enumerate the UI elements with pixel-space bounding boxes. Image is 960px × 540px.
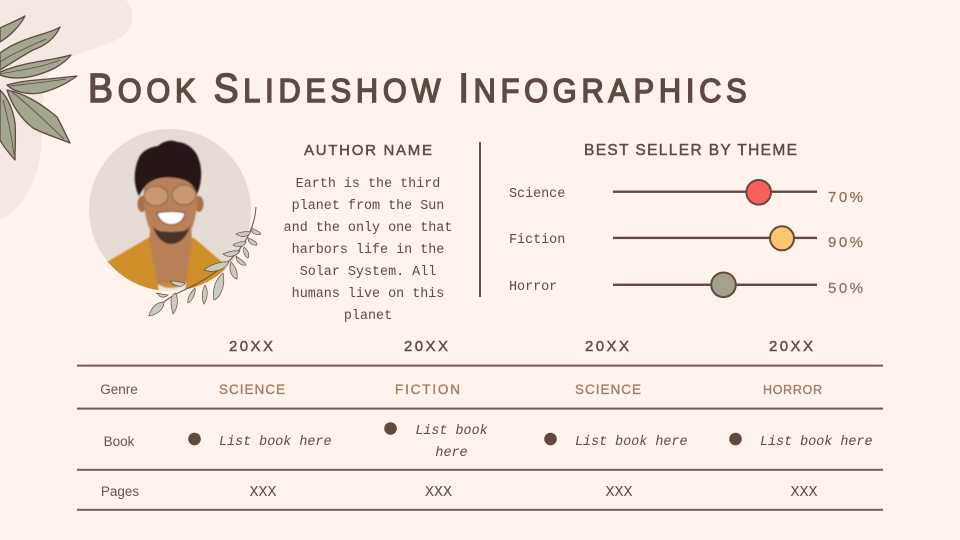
- row: pages: XXX: [425, 484, 452, 501]
- slider: horror 50%: 50%: [828, 280, 863, 297]
- title: BOOK SLIDESHOW INFOGRAPHICS: [88, 67, 747, 111]
- beard: [153, 226, 190, 244]
- author description: [284, 177, 452, 324]
- author description: and the only one that: [284, 221, 452, 236]
- twig decoration: [149, 207, 261, 316]
- author description: planet from the Sun: [292, 199, 444, 214]
- ears: [138, 196, 146, 212]
- row: book: List book here: [219, 435, 332, 450]
- row: book: [104, 422, 872, 461]
- row: pages: Pages: [101, 484, 139, 499]
- author description: Earth is the third: [296, 177, 440, 192]
- row: book: here: [435, 446, 468, 461]
- icon: corner leaves: [0, 16, 77, 160]
- row: pages: XXX: [605, 484, 633, 501]
- slider: fiction 90%: [509, 226, 863, 251]
- slider: horror 50%: Horror: [509, 280, 557, 295]
- author photo: [89, 129, 261, 316]
- table: [77, 338, 883, 511]
- row: book: Book: [104, 434, 135, 449]
- decorative background blob: [0, 0, 133, 220]
- slider: science 70%: Science: [509, 187, 565, 202]
- row: pages: [101, 484, 818, 501]
- author description: planet: [344, 309, 392, 324]
- slider: fiction 90%: 90%: [828, 234, 863, 251]
- year headers: 20XX: [404, 338, 448, 355]
- face: [142, 176, 198, 230]
- shirt: [107, 237, 226, 290]
- row: genre: Genre: [100, 382, 138, 397]
- row: genre: FICTION: [395, 382, 460, 397]
- row: book: List book here: [575, 435, 688, 450]
- author description: humans live on this: [292, 287, 444, 302]
- slider: science 70%: 70%: [828, 189, 863, 206]
- row: genre: SCIENCE: [575, 382, 641, 397]
- slider: horror 50%: [509, 272, 863, 297]
- table rules: [77, 365, 883, 511]
- year headers: 20XX: [585, 338, 629, 355]
- hair: [135, 141, 201, 196]
- slider: fiction 90%: Fiction: [509, 233, 565, 248]
- row: pages: XXX: [790, 484, 818, 501]
- row: genre: HORROR: [763, 383, 822, 397]
- year headers: 20XX: [769, 338, 813, 355]
- slider: science 70%: [509, 180, 863, 206]
- author description: harbors life in the: [292, 243, 444, 258]
- row: genre: [100, 382, 822, 397]
- glasses: [144, 185, 196, 206]
- row: book: List book: [415, 424, 488, 439]
- smile: [157, 212, 185, 225]
- neck and chest: [149, 225, 192, 284]
- row: genre: SCIENCE: [219, 382, 285, 397]
- row: pages: XXX: [249, 484, 277, 501]
- year headers: [229, 338, 813, 355]
- heading: author name: AUTHOR NAME: [304, 142, 432, 159]
- heading: best seller by theme: BEST SELLER BY THEME: [584, 142, 797, 159]
- row: book: List book here: [760, 435, 872, 450]
- year headers: 20XX: [229, 338, 273, 355]
- author description: Solar System. All: [300, 265, 436, 280]
